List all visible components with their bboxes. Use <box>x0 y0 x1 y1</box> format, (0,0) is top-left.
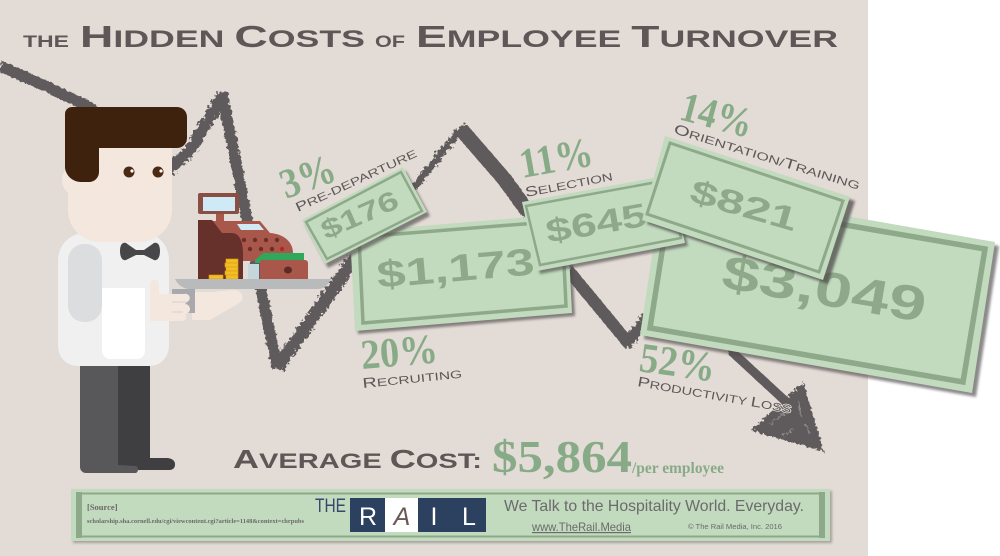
source text: scholarship.sha.cornell.edu/cgi/viewcontent.cgi?article=1148&context=chrpubs <box>87 518 304 525</box>
legs and shoes <box>80 365 175 473</box>
percentage label: 52% productivity loss: 52% <box>637 335 718 391</box>
banknotes <box>255 253 304 263</box>
average cost: /per employee <box>631 460 724 477</box>
hair <box>65 107 187 182</box>
hand <box>150 280 190 321</box>
declining brush line chart with arrow <box>0 66 822 450</box>
cuff <box>172 289 195 313</box>
bill: $645 selection <box>522 175 688 274</box>
percentage label: 11% selection: 11% <box>516 130 597 188</box>
cash register on tray <box>175 193 331 289</box>
cup <box>248 264 259 279</box>
percentage label: 3% pre-departure <box>274 145 419 215</box>
bill: $176 pre-departure <box>302 167 430 268</box>
title: E MPLOYEE T URNOVER <box>416 19 838 54</box>
sleeve shading <box>68 244 102 322</box>
percentage label: 52% productivity loss: PRODUCTIVITY LOSS <box>636 373 793 416</box>
logo: The Rail: THE <box>315 496 346 517</box>
logo: The Rail: A <box>392 503 410 531</box>
bill: $821 orientation/training <box>642 136 855 284</box>
footer banner <box>71 489 832 543</box>
title: H IDDEN C OSTS <box>80 19 365 54</box>
apron <box>102 288 145 359</box>
average cost <box>233 431 724 482</box>
percentage label: 11% selection: SELECTION <box>524 167 614 200</box>
display <box>198 193 239 214</box>
logo: The Rail: R <box>359 503 377 531</box>
bill: $821 orientation/training: $821 <box>686 172 802 238</box>
percentage label: 20% recruiting: 20% <box>359 326 440 379</box>
tagline: We Talk to the Hospitality World. Everyday. <box>504 498 804 515</box>
wallet <box>260 260 308 279</box>
logo: The Rail <box>315 496 486 532</box>
title: THE <box>23 32 69 51</box>
percentage label: 20% recruiting <box>359 326 463 391</box>
percentage label: 14% orientation/training: 14% <box>675 84 758 148</box>
percentage label: 14% orientation/training <box>672 84 862 193</box>
website: www.TheRail.Media <box>531 520 631 534</box>
waiter character <box>58 107 243 473</box>
source text: [Source] <box>87 502 118 512</box>
average cost: A VERAGE C OST: <box>233 444 482 474</box>
title <box>23 19 838 54</box>
percentage label: 20% recruiting: R ECRUITING <box>362 365 463 391</box>
small screen <box>237 224 264 230</box>
eyes <box>124 166 164 178</box>
coins <box>209 259 238 279</box>
keypad buttons <box>242 238 284 251</box>
bill: $1,173 recruiting <box>350 214 575 334</box>
logo: The Rail: I <box>431 503 437 531</box>
tray <box>175 279 331 289</box>
forearm <box>192 290 243 320</box>
percentage label: 3% pre-departure: 3% <box>274 146 342 208</box>
source text <box>87 502 304 525</box>
title: OF <box>375 32 405 51</box>
copyright: © The Rail Media, Inc. 2016 <box>688 522 782 531</box>
percentage label: 14% orientation/training: ORIENTATION/ TRAINING <box>672 121 862 193</box>
bill: $1,173 recruiting: $1,173 <box>375 241 536 297</box>
average cost: $5,864 <box>492 431 632 482</box>
bow tie <box>120 243 160 260</box>
logo: The Rail: L <box>462 503 476 531</box>
bill: $645 selection: $645 <box>543 196 650 250</box>
percentage label: 52% productivity loss <box>636 335 793 416</box>
bill: $176 pre-departure: $176 <box>316 185 403 245</box>
head <box>68 148 172 242</box>
bill: $3,049 productivity loss <box>640 184 999 397</box>
torso <box>58 233 169 366</box>
ear <box>62 167 80 193</box>
register body <box>198 221 293 279</box>
bill: $3,049 productivity loss: $3,049 <box>718 246 930 333</box>
percentage label: 3% pre-departure: PRE-DEPARTURE <box>293 145 419 215</box>
